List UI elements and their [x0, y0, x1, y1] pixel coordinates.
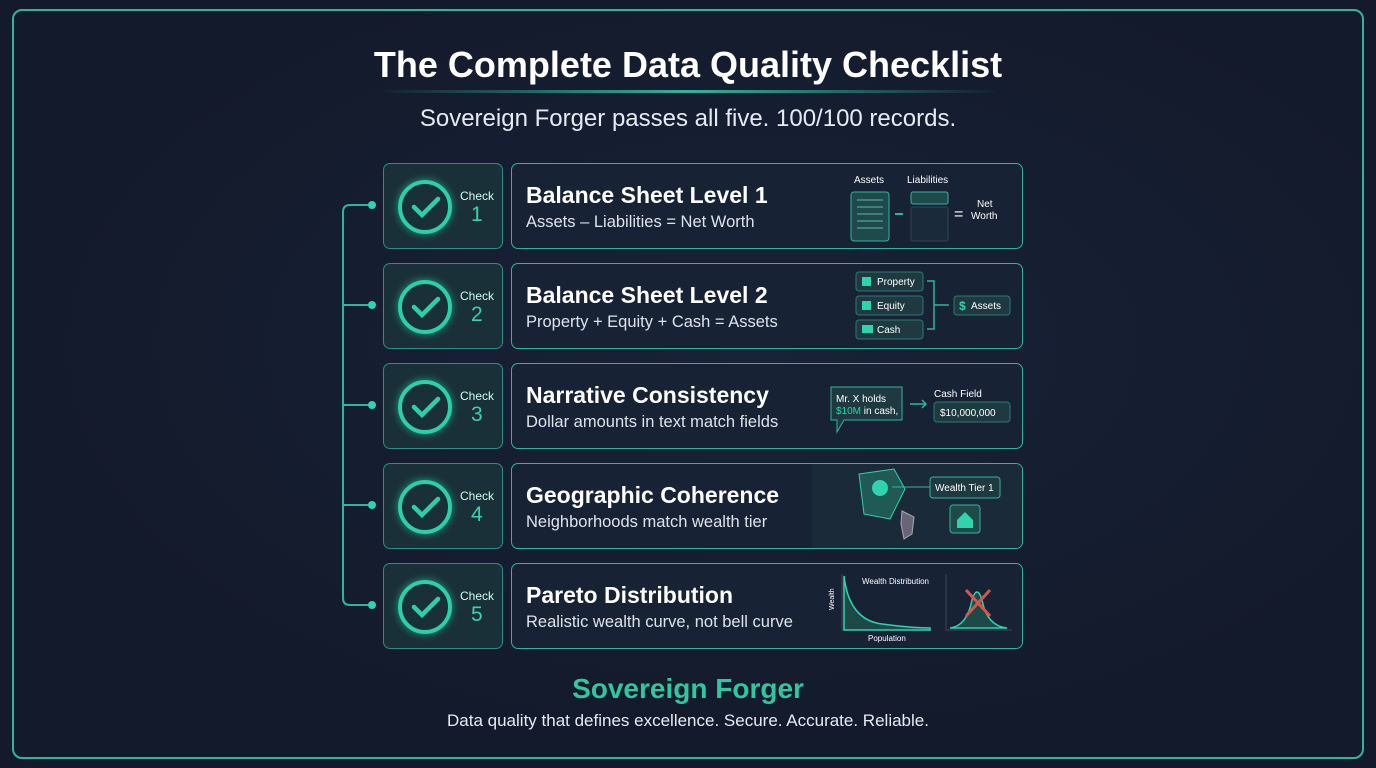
diagram: balance sheet: Assets — [854, 175, 884, 186]
diagram: text to field: $10M in cash, — [836, 406, 898, 417]
check 1: 1 — [471, 203, 483, 226]
diagram: asset components — [856, 272, 1010, 340]
card 2 — [511, 263, 1023, 349]
check 2: 2 — [471, 303, 483, 326]
diagram: pareto vs bell curve: Wealth Distribution — [862, 577, 929, 586]
check 5 — [383, 563, 503, 649]
check 4 — [383, 463, 503, 549]
card 3: Dollar amounts in text match fields — [526, 413, 778, 431]
check 2 — [383, 263, 503, 349]
check 1 — [383, 163, 503, 249]
diagram: pareto vs bell curve: Wealth — [829, 588, 836, 610]
diagram: pareto vs bell curve — [828, 574, 1012, 643]
diagram: asset components: $ — [959, 299, 966, 313]
card 5 — [511, 563, 1023, 649]
check 3 — [383, 363, 503, 449]
diagram: text to field: Cash Field — [934, 389, 982, 400]
card 1: Balance Sheet Level 1 — [526, 182, 768, 208]
card 1 — [511, 163, 1023, 249]
check 4: Check — [460, 489, 494, 503]
connector line — [342, 201, 376, 609]
card 3 — [511, 363, 1023, 449]
card 5: Pareto Distribution — [526, 582, 733, 608]
title: The Complete Data Quality Checklist — [374, 44, 1002, 85]
diagram: balance sheet — [850, 175, 998, 242]
card 3: Narrative Consistency — [526, 382, 769, 408]
diagram: asset components: Assets — [971, 301, 1001, 312]
diagram: balance sheet: Liabilities — [907, 175, 948, 186]
footer brand: Sovereign Forger — [572, 673, 804, 704]
check 5: Check — [460, 589, 494, 603]
diagram: text to field: Mr. X holds — [836, 394, 886, 405]
card 4: Neighborhoods match wealth tier — [526, 513, 767, 531]
check 4: 4 — [471, 503, 483, 526]
diagram: balance sheet: Worth — [971, 211, 998, 222]
card 4: Geographic Coherence — [526, 482, 779, 508]
diagram: map: Wealth Tier 1 — [935, 483, 994, 494]
diagram: map — [858, 464, 1022, 548]
diagram: asset components: Equity — [877, 301, 905, 312]
card 1: Assets – Liabilities = Net Worth — [526, 213, 755, 231]
diagram: balance sheet: = — [954, 206, 963, 223]
card 2: Balance Sheet Level 2 — [526, 282, 768, 308]
diagram: text to field — [830, 386, 1010, 434]
check 1: Check — [460, 189, 494, 203]
diagram: pareto vs bell curve: Population — [868, 634, 906, 643]
check 3: Check — [460, 389, 494, 403]
diagram: asset components: Property — [877, 277, 915, 288]
footer tagline: Data quality that defines excellence. Secure. Accurate. Reliable. — [447, 711, 929, 730]
card 5: Realistic wealth curve, not bell curve — [526, 613, 793, 631]
diagram: asset components: Cash — [877, 325, 900, 336]
card 4 — [511, 463, 1023, 549]
diagram: text to field: $10,000,000 — [940, 408, 996, 419]
check 2: Check — [460, 289, 494, 303]
diagram: balance sheet: Net — [977, 199, 993, 210]
check 3: 3 — [471, 403, 483, 426]
check 5: 5 — [471, 603, 483, 626]
subtitle: Sovereign Forger passes all five. 100/100 records. — [420, 105, 956, 132]
card 2: Property + Equity + Cash = Assets — [526, 313, 778, 331]
